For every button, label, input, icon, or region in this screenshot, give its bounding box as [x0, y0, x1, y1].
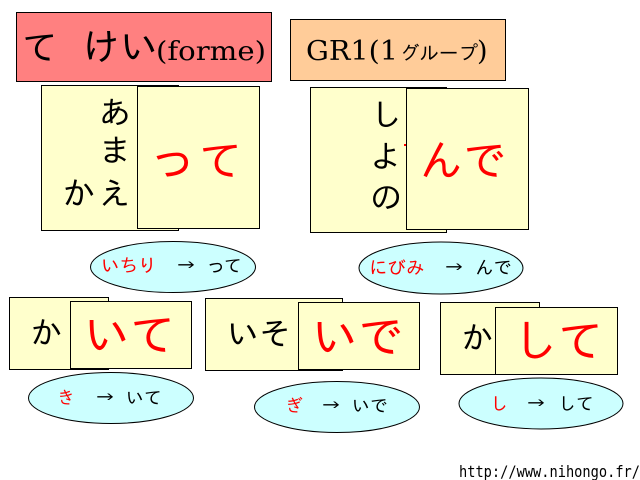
card: tsu-ru-u to tte: っ	[148, 135, 198, 185]
card: shi to shite	[440, 302, 618, 374]
callout: i chi ri to tte	[90, 242, 256, 292]
callout: ki to ite: いて	[126, 389, 162, 407]
callout: i chi ri to tte: いちり	[101, 257, 156, 275]
callout: ki to ite: →	[96, 389, 114, 407]
heading: group 1: GR1(1	[306, 36, 398, 67]
heading: group 1	[290, 20, 506, 80]
card: gi to ide: いそ	[227, 317, 291, 349]
card: tsu-ru-u to tte: ま	[99, 134, 131, 166]
callout: shi to shite: して	[558, 395, 594, 413]
card: tsu-ru-u to tte: え	[99, 177, 131, 209]
callout: ni bi mi to nde: →	[445, 259, 463, 277]
card: nu-bu-mu to nde: よ	[370, 140, 402, 172]
card: nu-bu-mu to nde: の	[370, 181, 402, 213]
title: te-form: (forme)	[156, 37, 266, 67]
card: ki to ite	[10, 298, 192, 370]
title: te-form	[16, 12, 272, 82]
callout: i chi ri to tte: て	[224, 257, 242, 275]
card: shi to shite: して	[512, 317, 604, 363]
card: ki to ite: いて	[84, 311, 176, 357]
heading: group 1: グループ	[400, 43, 478, 63]
title: te-form: て	[22, 29, 58, 65]
card: shi to shite: か	[461, 321, 493, 353]
callout: shi to shite: し	[490, 395, 508, 413]
callout: ni bi mi to nde: んで	[475, 259, 512, 277]
callout: gi to ide: ぎ	[285, 396, 303, 415]
card: tsu-ru-u to tte: あ	[99, 96, 131, 128]
card: nu-bu-mu to nde: し	[370, 98, 402, 130]
callout: ni bi mi to nde: にびみ	[369, 259, 424, 277]
heading: group 1: )	[477, 36, 488, 67]
callout: shi to shite: →	[527, 395, 545, 413]
card: gi to ide	[206, 298, 420, 370]
card: tsu-ru-u to tte	[42, 86, 260, 230]
callout: i chi ri to tte: →	[177, 257, 195, 275]
callout: ki to ite	[28, 372, 194, 424]
callout: gi to ide: →	[322, 397, 340, 415]
card: nu-bu-mu to nde: んで	[419, 138, 507, 182]
callout: i chi ri to tte: っ	[206, 256, 226, 276]
card: nu-bu-mu to nde	[310, 88, 528, 232]
callout: gi to ide: いで	[352, 397, 388, 415]
card: gi to ide: いで	[312, 313, 404, 359]
card: tsu-ru-u to tte: て	[199, 138, 243, 182]
title: te-form: けい	[82, 27, 158, 65]
card: tsu-ru-u to tte: か	[62, 176, 95, 209]
callout: shi to shite	[459, 378, 623, 429]
card: ki to ite: か	[30, 316, 62, 348]
callout: ni bi mi to nde	[359, 242, 523, 294]
callout: ki to ite: き	[57, 389, 75, 407]
callout: gi to ide	[254, 382, 420, 432]
